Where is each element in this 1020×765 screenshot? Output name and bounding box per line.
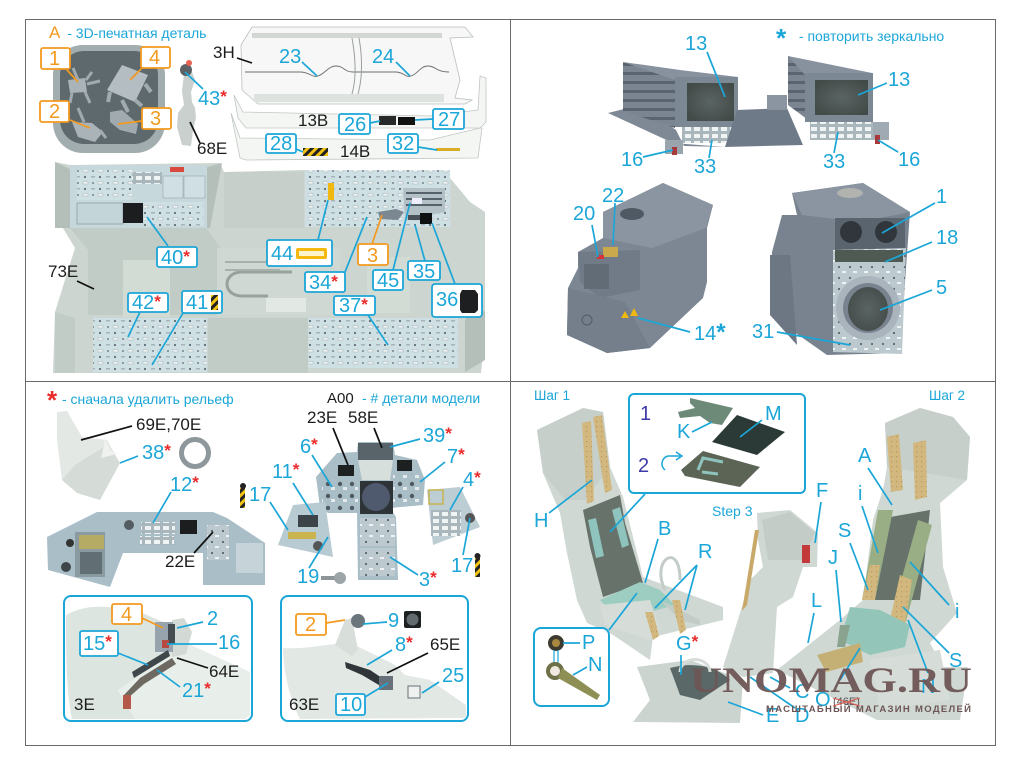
label 4: 4 xyxy=(149,47,160,69)
label 15: 15 xyxy=(83,633,105,655)
label 33 left: 33 xyxy=(694,156,716,178)
label 12: * xyxy=(192,473,199,492)
label 68E xyxy=(190,122,227,158)
label 73E: 73E xyxy=(48,262,78,281)
label 21 xyxy=(157,670,211,702)
label 21: 21 xyxy=(182,680,204,702)
label 10: 10 xyxy=(340,694,362,716)
label 17 left: 17 xyxy=(249,484,271,506)
right upper console panel xyxy=(305,170,450,227)
label 16 left xyxy=(621,149,673,171)
label F xyxy=(815,480,828,543)
label 23E: 23Е xyxy=(307,408,337,427)
seat: step 2 xyxy=(777,408,970,720)
label 58E: 58Е xyxy=(348,408,378,427)
heading: repeat mirrored: - повторить зеркально xyxy=(795,28,944,44)
heading: remove relief first: * xyxy=(47,385,58,415)
label 17 right xyxy=(451,518,473,577)
label M xyxy=(740,403,782,437)
label 4 xyxy=(450,468,481,510)
label 41 xyxy=(152,291,222,365)
label L xyxy=(808,590,822,643)
heading: model part numbers: - # детали модели xyxy=(362,390,480,406)
label 13 right: 13 xyxy=(888,69,910,91)
lower left console panel xyxy=(93,318,207,372)
label 64E: 64Е xyxy=(209,662,239,681)
label 3: 3 xyxy=(419,569,430,591)
inset: P and N parts: P xyxy=(582,632,595,654)
label orange 2: 2 xyxy=(305,614,316,636)
label S lower: S xyxy=(949,650,962,672)
label 36: 36 xyxy=(436,289,458,311)
label 33 right xyxy=(823,132,845,173)
label 3 xyxy=(390,557,437,591)
label 1 xyxy=(882,186,947,233)
label 37: 37 xyxy=(339,295,361,317)
label 25 xyxy=(422,665,464,693)
label 22 xyxy=(602,185,624,245)
label 26 xyxy=(339,114,380,136)
left upper console panel xyxy=(70,165,207,228)
label 39: 39 xyxy=(423,425,445,447)
label 39 xyxy=(390,424,452,447)
label 6: 6 xyxy=(300,436,311,458)
panel: avionics units top-right xyxy=(567,23,958,355)
cockpit tub 73E xyxy=(53,162,485,373)
decal 26 xyxy=(379,116,396,125)
label 12 xyxy=(153,473,199,523)
inset: P and N parts: N xyxy=(588,654,602,676)
heading: step 2: Шаг 2 xyxy=(929,388,965,403)
label 33 right: 33 xyxy=(823,151,845,173)
panel: ejection seats bottom-right xyxy=(534,388,972,727)
label 13 left: 13 xyxy=(685,33,707,55)
label S upper xyxy=(838,520,868,590)
label 7: 7 xyxy=(447,446,458,468)
label orange 3 xyxy=(358,215,388,267)
callout: 63E sill xyxy=(281,596,468,721)
label G: G xyxy=(676,633,692,655)
label 1 xyxy=(41,48,78,82)
label i upper: i xyxy=(858,483,862,505)
label 35: 35 xyxy=(413,261,435,283)
label 38 xyxy=(120,441,171,464)
label 20 xyxy=(573,203,598,257)
label 9 xyxy=(363,610,399,632)
heading: repeat mirrored: * xyxy=(776,23,787,53)
label orange 4: 4 xyxy=(121,604,132,626)
label N under watermark: N xyxy=(921,676,935,698)
label 32 xyxy=(388,133,437,155)
label i lower: i xyxy=(955,601,959,623)
right wing panel xyxy=(427,487,480,545)
label 24: 24 xyxy=(372,46,394,68)
windscreen sill 3H xyxy=(241,27,473,104)
label 22E xyxy=(165,532,213,571)
label orange 4 xyxy=(112,604,163,628)
label 33 left xyxy=(694,140,716,178)
label 40: * xyxy=(183,247,190,266)
watermark xyxy=(690,660,972,715)
label 16: 16 xyxy=(218,632,240,654)
label 23E xyxy=(307,408,348,465)
label 3 xyxy=(118,108,171,130)
label orange 3: 3 xyxy=(367,245,378,267)
label 11: * xyxy=(293,460,300,479)
label 17 left xyxy=(249,484,288,530)
label 73E xyxy=(48,262,94,289)
label R: R xyxy=(698,541,712,563)
side console panel xyxy=(47,512,265,587)
label 24 xyxy=(372,46,410,76)
label 3: 3 xyxy=(150,108,161,130)
label 7 xyxy=(420,445,465,482)
label 4: 4 xyxy=(463,469,474,491)
label N under watermark xyxy=(908,620,935,698)
label 42: 42 xyxy=(132,292,154,314)
label O: O xyxy=(815,689,831,711)
label 11: 11 xyxy=(272,461,293,483)
label 12: 12 xyxy=(170,474,192,496)
label 36 xyxy=(432,223,482,317)
label 14 xyxy=(638,318,726,346)
watermark: МАСШТАБНЫЙ МАГАЗИН МОДЕЛЕЙ xyxy=(766,703,971,715)
label 19: 19 xyxy=(297,566,319,588)
label E: E xyxy=(766,705,779,727)
label 14: 14 xyxy=(694,323,716,345)
right block unit with radar scope xyxy=(770,183,910,355)
label M: M xyxy=(765,403,782,425)
label 15 xyxy=(80,631,148,665)
decal 27 xyxy=(398,117,415,125)
label 5: 5 xyxy=(936,277,947,299)
label 26: 26 xyxy=(344,114,366,136)
part 19 xyxy=(321,572,346,584)
label 23: 23 xyxy=(279,46,301,68)
label 16 xyxy=(167,632,240,654)
callout: 3E sill xyxy=(64,596,252,721)
seat: step 1 xyxy=(537,408,723,660)
label 34: 34 xyxy=(309,272,331,294)
heading: remove relief first: - сначала удалить рельеф xyxy=(62,391,234,407)
label 38: * xyxy=(164,441,171,460)
label 4 xyxy=(130,47,170,80)
inset: P and N parts xyxy=(534,628,609,706)
label 18: 18 xyxy=(936,227,958,249)
label S lower xyxy=(903,607,962,672)
label O xyxy=(815,648,860,711)
seat side part 69E,70E xyxy=(57,411,120,500)
part 17 right xyxy=(474,553,480,577)
label 22E: 22Е xyxy=(165,552,195,571)
label 65E: 65Е xyxy=(430,635,460,654)
label 42: * xyxy=(154,292,161,311)
callout: strap assembly xyxy=(629,394,805,493)
label 3H: 3Н xyxy=(213,43,235,62)
label 1: 1 xyxy=(936,186,947,208)
label 69E,70E: 69Е,70Е xyxy=(136,415,201,434)
label 31: 31 xyxy=(752,321,774,343)
label 37: * xyxy=(361,295,368,314)
label 6: * xyxy=(311,435,318,454)
label 28: 28 xyxy=(270,133,292,155)
label 42 xyxy=(128,292,168,337)
label 65E xyxy=(387,635,460,673)
main instrument panel xyxy=(316,442,425,580)
label J xyxy=(828,547,841,622)
label 6 xyxy=(300,435,332,487)
floor bridge between units xyxy=(725,95,803,147)
label C: C xyxy=(795,681,809,703)
label 2: 2 xyxy=(207,608,218,630)
label 40 xyxy=(147,217,197,269)
label 8: * xyxy=(406,633,413,652)
label 28 xyxy=(266,133,303,155)
label callout 2: 2 xyxy=(638,455,649,477)
watermark: UNOMAG.RU xyxy=(690,660,972,700)
decal 28 xyxy=(303,148,328,156)
label 22: 22 xyxy=(602,185,624,207)
label 13B: 13В xyxy=(298,111,328,130)
label 21: * xyxy=(204,679,211,698)
label 64E xyxy=(177,658,239,681)
label 58E xyxy=(348,408,382,448)
label 16 right: 16 xyxy=(898,149,920,171)
label 32: 32 xyxy=(392,133,414,155)
label L: L xyxy=(811,590,822,612)
label 13 right xyxy=(858,69,910,95)
label 8: 8 xyxy=(395,634,406,656)
control stick 68E with part 43 xyxy=(177,60,196,146)
label 17 right: 17 xyxy=(451,555,473,577)
label H: H xyxy=(534,510,548,532)
label 3H xyxy=(213,43,252,63)
label 27 xyxy=(415,109,464,131)
label 25: 25 xyxy=(442,665,464,687)
label 16 left: 16 xyxy=(621,149,643,171)
label 45: 45 xyxy=(377,270,399,292)
panel: 3D-printed parts top-left xyxy=(40,23,486,373)
label i upper xyxy=(858,483,878,553)
label 38: 38 xyxy=(142,442,164,464)
label 15: * xyxy=(105,632,112,651)
label 63E: 63Е xyxy=(289,695,319,714)
heading: step 3: Step 3 xyxy=(712,503,753,519)
label 43: 43 xyxy=(198,88,220,110)
label 14B: 14В xyxy=(340,142,370,161)
label D xyxy=(750,677,809,727)
label 23 xyxy=(279,46,317,76)
label 45 xyxy=(373,203,410,292)
panel: cockpit panels bottom-left xyxy=(47,385,481,721)
label 8 xyxy=(367,633,413,665)
label orange 2 xyxy=(296,614,345,636)
label D: D xyxy=(795,705,809,727)
left block unit xyxy=(567,183,713,353)
label 16 right xyxy=(878,140,920,171)
seat: step 3 side view xyxy=(633,510,818,723)
label A xyxy=(858,445,892,505)
label K: K xyxy=(677,421,691,443)
label A: A xyxy=(858,445,872,467)
label 44 xyxy=(267,200,332,266)
label 18 xyxy=(885,227,958,262)
label S upper: S xyxy=(838,520,851,542)
label 2 xyxy=(177,608,218,630)
label 27: 27 xyxy=(438,109,460,131)
label 35 xyxy=(408,225,440,283)
heading: A 3D part: А - 3D-печатная деталь xyxy=(49,23,206,42)
label B: B xyxy=(658,518,671,540)
label B xyxy=(645,518,671,583)
label 31 xyxy=(752,321,850,345)
label 13 left xyxy=(685,33,725,97)
label 43: * xyxy=(220,87,227,106)
label callout 1: 1 xyxy=(640,403,651,425)
label 39: * xyxy=(445,424,452,443)
label C xyxy=(770,677,809,703)
3D print tray with parts xyxy=(53,45,165,153)
label H xyxy=(534,480,592,532)
line to callout xyxy=(610,494,645,532)
label J: J xyxy=(828,547,838,569)
gasket ring xyxy=(182,440,208,466)
label K xyxy=(677,421,712,443)
label 41: 41 xyxy=(186,292,208,314)
label 37 xyxy=(334,295,388,345)
part 17 left xyxy=(240,483,246,508)
label 2 xyxy=(40,101,90,128)
heading: model part numbers: А00 xyxy=(327,390,354,407)
label 7: * xyxy=(458,445,465,464)
label 4: * xyxy=(474,468,481,487)
label 34 xyxy=(305,217,367,294)
canopy rails 13B and 14B xyxy=(231,76,486,160)
label 44: 44 xyxy=(271,243,293,265)
right display unit xyxy=(788,56,889,144)
label 5 xyxy=(880,277,947,310)
heading: step 1: Шаг 1 xyxy=(534,388,570,403)
watermark: (46E) xyxy=(833,696,860,708)
label G xyxy=(676,632,699,675)
label 1: 1 xyxy=(49,48,60,70)
label 34: * xyxy=(331,272,338,291)
line to inset xyxy=(609,593,637,630)
label 2: 2 xyxy=(49,101,60,123)
label 20: 20 xyxy=(573,203,595,225)
label 69E,70E xyxy=(81,415,201,440)
label 14: * xyxy=(716,319,726,346)
label i lower xyxy=(910,562,959,623)
label G: * xyxy=(692,632,699,651)
label 3: * xyxy=(430,568,437,587)
decal 32 xyxy=(436,148,460,151)
lower right console panel xyxy=(308,318,458,368)
left display unit xyxy=(608,62,738,155)
label R xyxy=(655,541,712,610)
label 40: 40 xyxy=(161,247,183,269)
label 3E: 3Е xyxy=(74,695,95,714)
label 11 xyxy=(272,460,313,515)
label 43 xyxy=(185,72,227,110)
left wing panel xyxy=(278,502,333,557)
label F: F xyxy=(816,480,828,502)
label 68E: 68E xyxy=(197,139,227,158)
label 19 xyxy=(297,537,328,588)
label E xyxy=(728,702,779,727)
label 10 xyxy=(336,683,388,716)
label 9: 9 xyxy=(388,610,399,632)
